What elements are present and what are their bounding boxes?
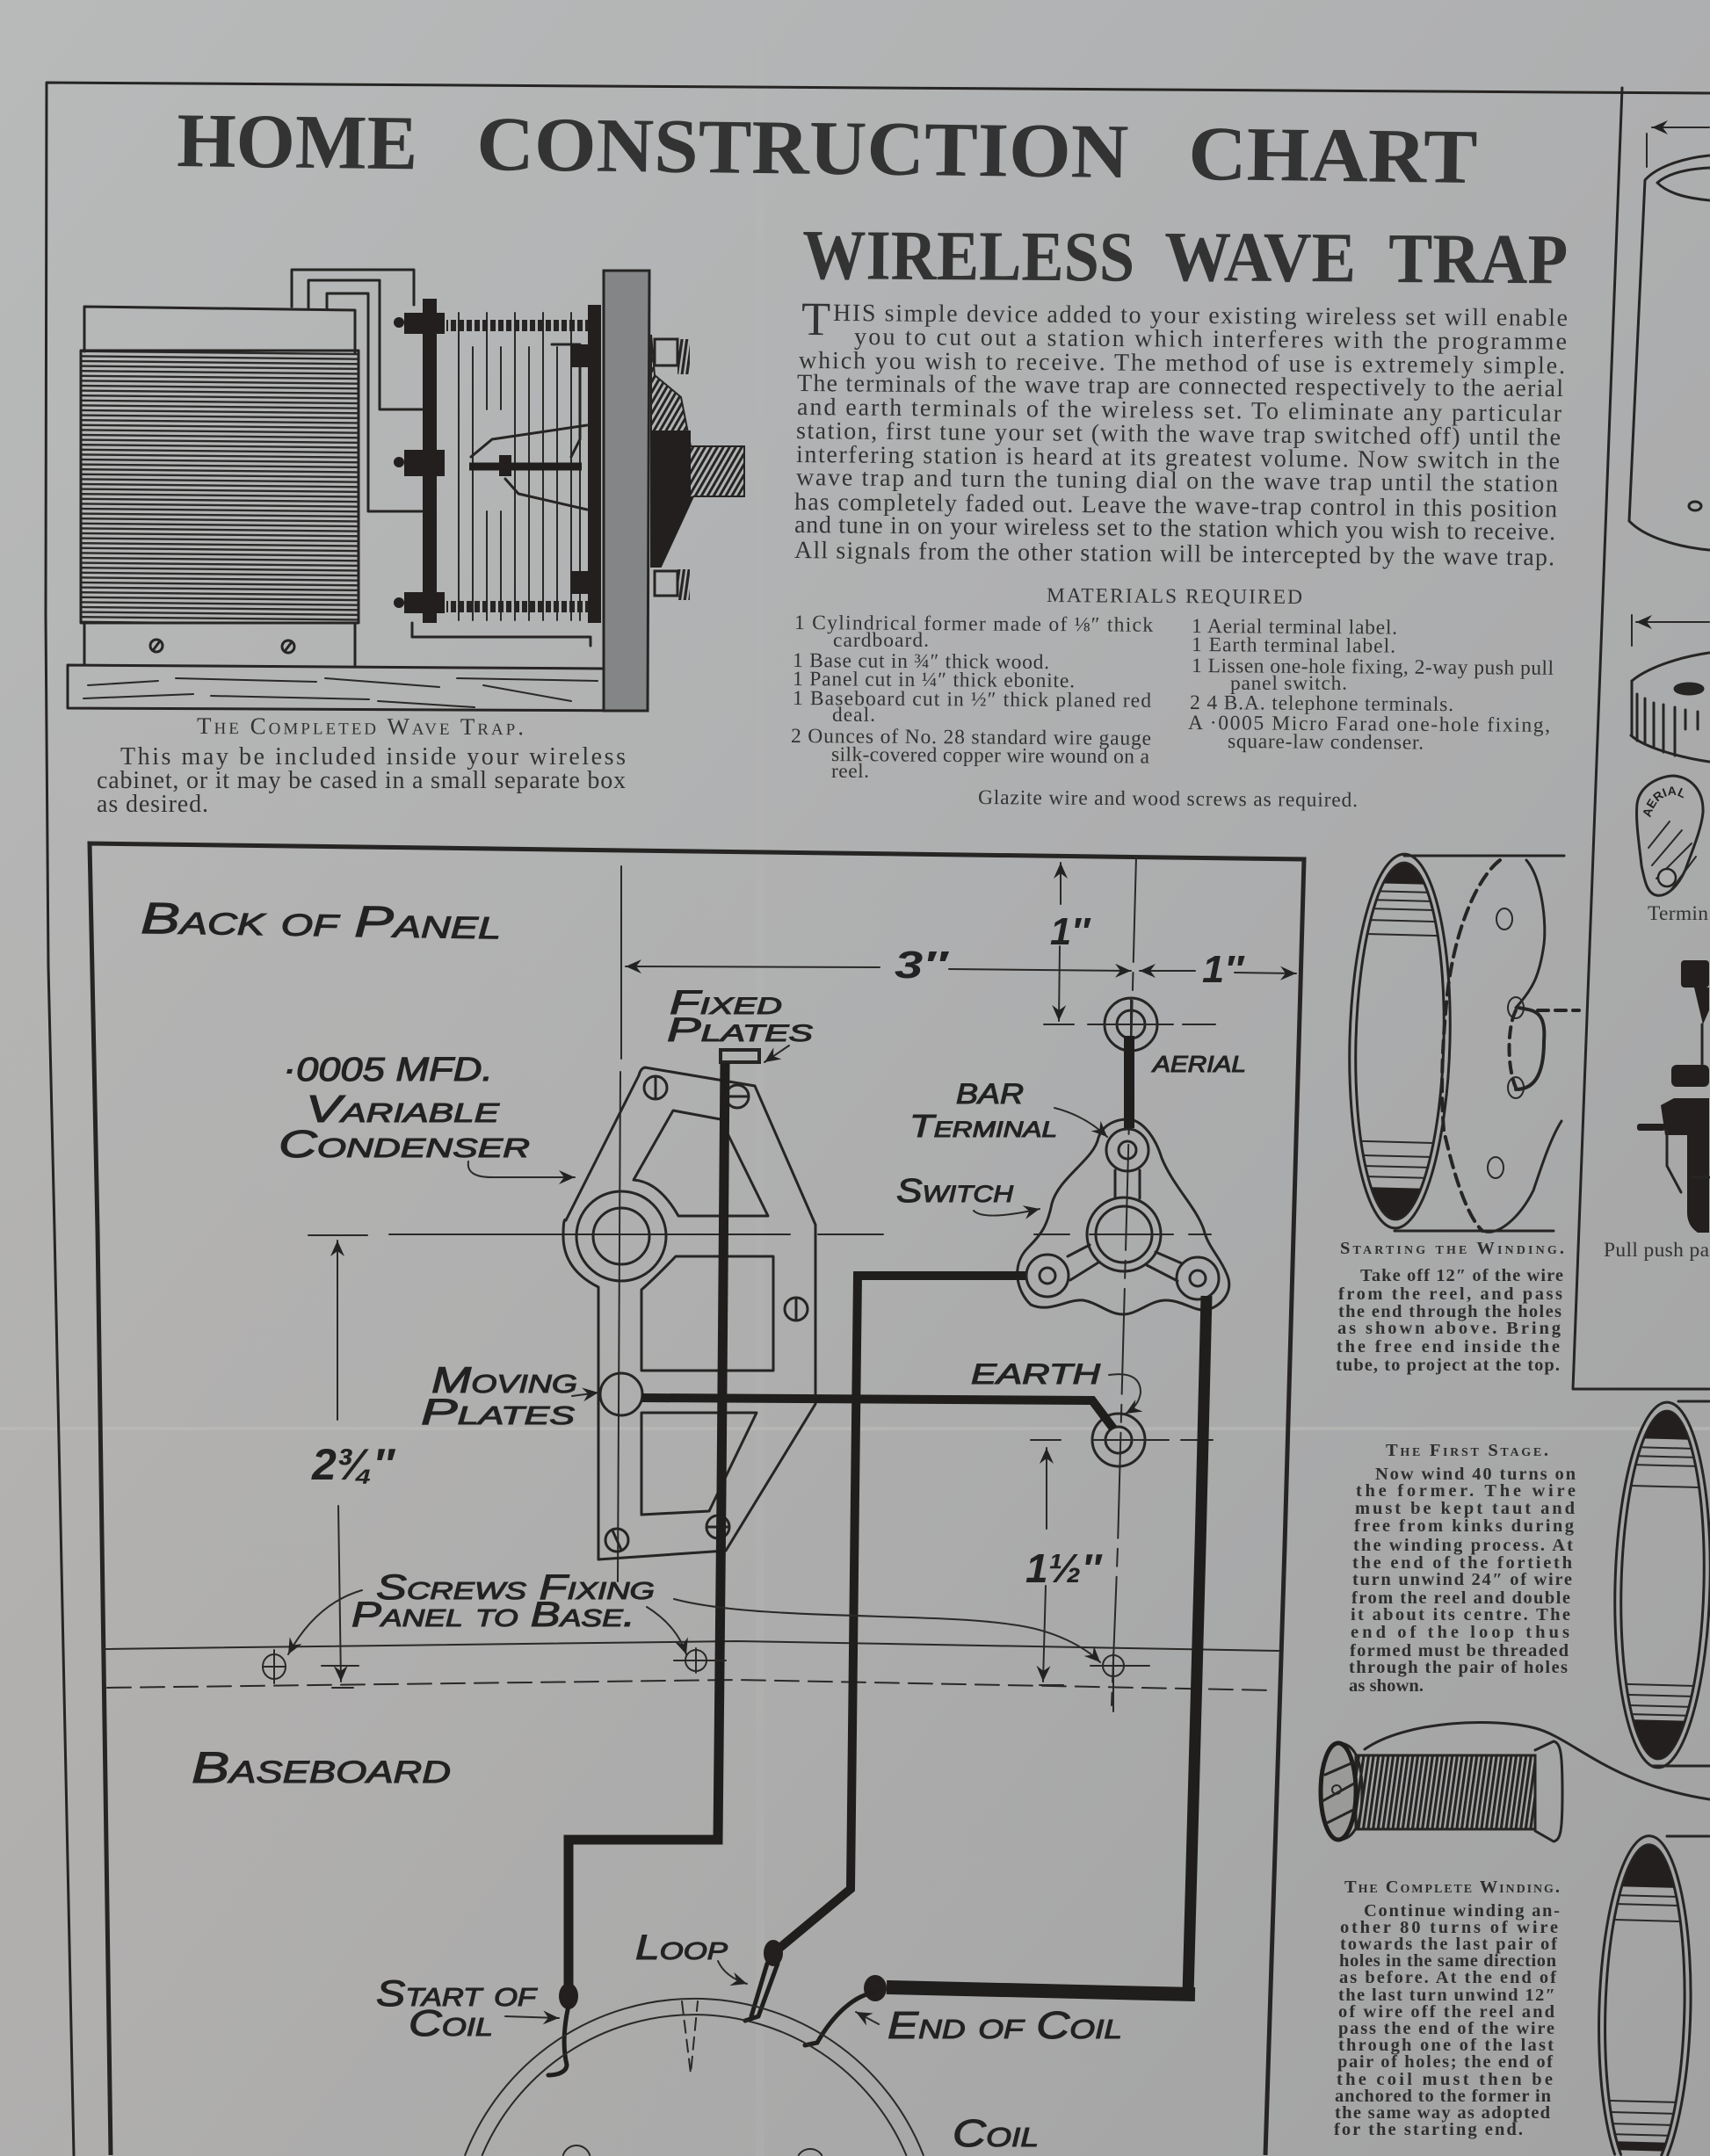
text block: introduction: which you wish to receive. The method of use is extremely simple.: [799, 347, 1565, 380]
panel: completed wave trap illustration: [68, 270, 744, 711]
text block: the first stage: through the pair of holes: [1349, 1658, 1568, 1677]
label: fixed plates: Fixed: [670, 985, 782, 1022]
materials list: left column: deal.: [832, 704, 875, 727]
dimension: 2 3/4 inch: 2¾″: [311, 1440, 396, 1489]
label: end of coil: End of Coil: [888, 2004, 1122, 2047]
text block: cabinet note: as desired.: [97, 791, 208, 818]
materials list: right column: 1 Lissen one-hole fixing, 2-way push pull: [1192, 655, 1554, 680]
heading: wireless wave trap: WIRELESS: [802, 215, 1134, 297]
text block: introduction: interfering station is heard at its greatest volume. Now switch in the: [796, 441, 1560, 475]
panel base lines: [104, 1641, 1279, 1690]
materials list: left column: 2 Ounces of No. 28 standard wire gauge: [791, 725, 1151, 750]
dimension: 1 1/2 inch: 1½″: [1025, 1545, 1103, 1591]
label: back of panel: Back of Panel: [141, 894, 502, 948]
text block: introduction: wave trap and turn the tuning dial on the wave trap until the station: [796, 464, 1558, 498]
materials list: right column: A ·0005 Micro Farad one-hole fixing,: [1188, 712, 1550, 737]
text block: the complete winding: pair of holes; the end of: [1337, 2052, 1554, 2072]
text block: introduction: and earth terminals of the wireless set. To eliminate any particular: [797, 394, 1562, 428]
materials list: right column: 1 Aerial terminal label.: [1192, 615, 1397, 640]
text block: the first stage: The First Stage.: [1386, 1441, 1548, 1460]
text block: the complete winding: the same way as adopted: [1335, 2103, 1551, 2123]
earth terminal: [1092, 1414, 1213, 1466]
label: earth: EARTH: [971, 1358, 1101, 1390]
fixed plates terminal: [721, 1050, 759, 1062]
label: moving plates: [421, 1359, 598, 1432]
dimension: 1 inch vertical: 1″: [1050, 910, 1091, 953]
title: [177, 98, 1478, 200]
condenser plates: [423, 299, 601, 623]
illustration: first stage former: [1611, 1401, 1710, 1769]
panel fixing screws: [263, 1648, 1149, 1683]
materials list: left column: 1 Baseboard cut in ½″ thick planed red: [793, 687, 1151, 713]
text block: starting the winding: Starting the Winding.: [1340, 1239, 1564, 1258]
materials list: right column: square-law condenser.: [1228, 730, 1424, 755]
heading: materials required: MATERIALS REQUIRED: [1047, 584, 1302, 609]
text block: starting the winding: tube, to project at the top.: [1336, 1356, 1560, 1375]
illustration: starting the winding: [1339, 850, 1579, 1234]
diagram frame: [90, 843, 1304, 2155]
terminals and nuts: [394, 313, 601, 613]
heading: wireless wave trap: WAVE: [1164, 217, 1356, 298]
text block: starting the winding: Take off 12″ of the wire: [1360, 1266, 1563, 1285]
materials list: right column: [1188, 615, 1554, 755]
materials note: Glazite wire and wood screws as required.: [978, 786, 1358, 812]
paper fold: horizontal: [0, 1427, 1710, 1430]
dimension: 1 1/2 inch: [1025, 1440, 1103, 1685]
label: variable condenser: ·0005 MFD.: [283, 1052, 493, 1089]
reference lines: [389, 857, 1211, 1711]
front panel: [604, 271, 649, 711]
title: CONSTRUCTION: [476, 102, 1129, 195]
text block: the first stage: it about its centre. The: [1351, 1605, 1570, 1624]
text block: introduction: HIS simple device added to your existing wireless set will enable: [833, 300, 1568, 332]
text block: the complete winding: Continue winding an-: [1364, 1901, 1560, 1921]
title: CHART: [1188, 112, 1478, 200]
label: bar terminal: BAR: [956, 1078, 1024, 1110]
text block: starting the winding: the end through the holes: [1338, 1302, 1561, 1321]
dimension: 2 3/4 inch: [308, 1235, 396, 1688]
text block: introduction: [794, 293, 1568, 571]
part: aerial terminal label: AERIAL: [1643, 786, 1684, 817]
label: baseboard: Baseboard: [192, 1743, 451, 1792]
text block: introduction: T: [801, 293, 830, 345]
materials list: left column: 1 Cylindrical former made of ⅛″ thick: [794, 611, 1153, 637]
text block: the first stage: end of the loop thus: [1351, 1623, 1569, 1642]
text block: the first stage: the end of the fortieth: [1352, 1553, 1573, 1573]
label: start of coil: [376, 1972, 559, 2044]
heading: wireless wave trap: TRAP: [1388, 219, 1568, 299]
text block: introduction: you to cut out a station which interferes with the programme: [854, 323, 1567, 356]
connecting wires: [292, 270, 591, 646]
text block: the complete winding: [1334, 1877, 1560, 2139]
part: cylindrical former: [1629, 127, 1709, 550]
text block: the complete winding: for the starting end.: [1334, 2120, 1523, 2139]
materials list: left column: reel.: [831, 760, 869, 783]
dimension: 1 inch horizontal: 1″: [1202, 948, 1245, 991]
tuning knob: [651, 335, 744, 600]
label: screws fixing panel to base: Panel to Base.: [351, 1595, 635, 1634]
text block: the first stage: from the reel and double: [1351, 1588, 1570, 1608]
heavy wiring: [569, 1036, 1206, 1996]
text block: introduction: The terminals of the wave trap are connected respectively to the aerial: [797, 370, 1563, 402]
illustration: reel of wire: [1321, 1723, 1709, 1841]
materials list: left column: 1 Panel cut in ¼″ thick ebonite.: [793, 668, 1075, 692]
caption: the completed wave trap: The Completed Wave Trap.: [197, 713, 524, 740]
materials list: left column: [791, 611, 1153, 783]
label: moving plates: Moving: [431, 1359, 577, 1400]
dimension: 3 inch: 3″: [895, 944, 950, 987]
label: moving plates: Plates: [421, 1391, 576, 1432]
illustration: complete winding former: [1599, 1835, 1709, 2155]
caption: pull push panel switch: Pull push pa: [1604, 1239, 1710, 1262]
title: HOME: [177, 98, 418, 186]
text block: the complete winding: anchored to the former in: [1335, 2087, 1552, 2106]
text block: cabinet note: This may be included inside your wireless: [120, 743, 626, 771]
text block: starting the winding: the free end inside the: [1337, 1337, 1560, 1357]
text block: the complete winding: as before. At the end of: [1339, 1968, 1557, 1987]
materials list: right column: 1 Earth terminal label.: [1192, 633, 1395, 658]
label: earth: [971, 1358, 1141, 1414]
label: aerial: AERIAL: [1151, 1051, 1246, 1077]
materials list: right column: 2 4 B.A. telephone terminals.: [1190, 691, 1453, 716]
part: base disc: [1631, 615, 1709, 762]
panel: parts frame at right: [1571, 86, 1710, 1390]
text block: the complete winding: pass the end of the wire: [1338, 2019, 1554, 2038]
text block: the complete winding: towards the last pair of: [1340, 1935, 1558, 1954]
text block: the complete winding: The Complete Winding.: [1344, 1877, 1560, 1897]
coil former: [81, 307, 359, 665]
wire terminals and coil leads: [548, 1940, 887, 2075]
text block: starting the winding: from the reel, and pass: [1338, 1284, 1562, 1304]
text block: the first stage: formed must be threaded: [1350, 1641, 1569, 1660]
label: screws fixing panel to base: Screws Fixing: [376, 1568, 655, 1607]
text block: introduction: and tune in on your wireless set to the station which you wish to receive.: [794, 511, 1555, 546]
materials list: left column: cardboard.: [833, 629, 929, 652]
caption: terminal label: Termin: [1648, 902, 1709, 925]
materials list: left column: silk-covered copper wire wound on a: [831, 743, 1150, 769]
text block: the first stage: as shown.: [1349, 1676, 1424, 1696]
text block: introduction: station, first tune your set (with the wave trap switched off) until the: [796, 417, 1561, 452]
label: switch: [896, 1173, 1040, 1216]
text block: the complete winding: the coil must then be: [1337, 2070, 1553, 2089]
text block: the first stage: [1349, 1441, 1576, 1696]
text block: the complete winding: holes in the same direction: [1339, 1951, 1557, 1971]
materials list: right column: panel switch.: [1230, 672, 1347, 695]
label: screws fixing panel to base: [288, 1568, 1100, 1662]
heading: wireless wave trap: [802, 215, 1568, 299]
aerial terminal: [1088, 998, 1215, 1051]
text block: the complete winding: the last turn unwind 12″: [1338, 1986, 1555, 2005]
label: coil: Coil: [953, 2112, 1039, 2155]
text block: the first stage: turn unwind 24″ of wire: [1352, 1570, 1572, 1589]
text block: the first stage: must be kept taut and: [1355, 1499, 1576, 1518]
label: variable condenser: Variable: [306, 1088, 499, 1131]
label: start of coil: Start of: [376, 1972, 539, 2014]
label: bar terminal: [909, 1078, 1107, 1144]
text block: introduction: All signals from the other station will be intercepted by the wave trap.: [794, 537, 1554, 571]
text block: the first stage: the former. The wire: [1356, 1481, 1576, 1501]
text block: the complete winding: through one of the last: [1338, 2036, 1554, 2055]
label: loop: [635, 1928, 747, 1984]
former circle: [465, 1999, 924, 2155]
label: switch: Switch: [896, 1173, 1014, 1210]
text block: starting the winding: as shown above. Bring: [1337, 1319, 1561, 1338]
label: variable condenser: [279, 1052, 575, 1177]
text block: the first stage: Now wind 40 turns on: [1375, 1465, 1576, 1484]
label: fixed plates: Plates: [667, 1012, 813, 1049]
text block: cabinet note: [97, 743, 626, 818]
push pull switch: [1018, 1119, 1229, 1314]
text block: the complete winding: other 80 turns of wire: [1340, 1918, 1558, 1937]
label: variable condenser: Condenser: [279, 1123, 530, 1166]
text block: the first stage: the winding process. At: [1353, 1536, 1573, 1555]
label: start of coil: Coil: [409, 2002, 493, 2044]
label: fixed plates: [667, 985, 813, 1062]
text block: cabinet note: cabinet, or it may be cased in a small separate box: [97, 767, 626, 794]
materials list: left column: 1 Base cut in ¾″ thick wood.: [793, 649, 1049, 674]
text block: the first stage: free from kinks during: [1354, 1516, 1575, 1536]
part: push pull switch: [1637, 960, 1709, 1233]
text block: introduction: has completely faded out. Leave the wave-trap control in this position: [794, 488, 1557, 523]
paper fold: vertical: [756, 0, 764, 2156]
text block: starting the winding: [1336, 1239, 1564, 1375]
variable condenser outline: [563, 1067, 815, 1559]
panel: back of panel wiring diagram: [90, 843, 1304, 2155]
baseboard: [68, 665, 648, 711]
part: aerial terminal label: [1635, 775, 1705, 897]
label: bar terminal: Terminal: [909, 1108, 1057, 1144]
label: loop: Loop: [635, 1928, 728, 1967]
text block: the complete winding: of wire off the reel and: [1338, 2002, 1555, 2022]
